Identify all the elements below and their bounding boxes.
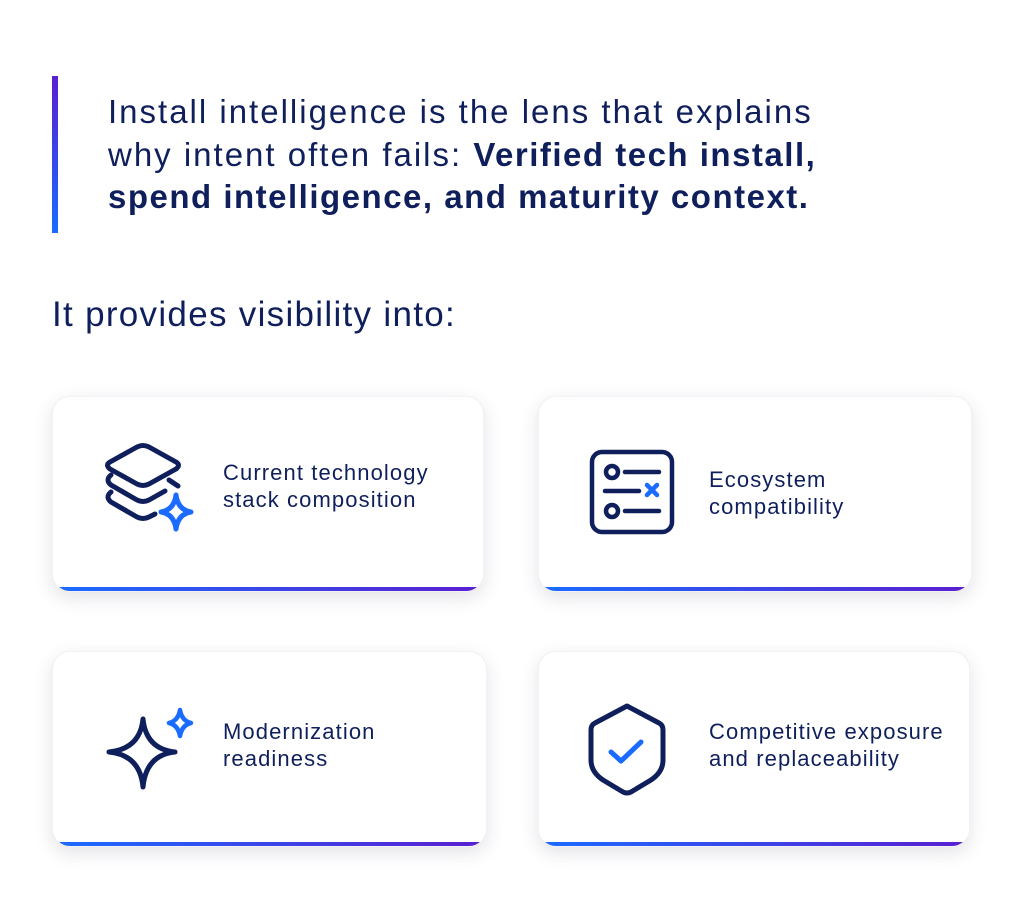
text bbox=[223, 460, 429, 512]
title: why intent often fails: Verified tech install, bbox=[108, 136, 816, 172]
card: technology stack bbox=[52, 396, 484, 592]
text bbox=[223, 719, 376, 771]
text bbox=[709, 719, 944, 771]
icon: shield check bbox=[588, 704, 666, 796]
icon: sparkles bbox=[106, 708, 194, 790]
icon: layers with sparkle bbox=[105, 443, 194, 532]
card: competitive exposure bbox=[538, 651, 970, 847]
text: Competitive exposure bbox=[709, 719, 944, 744]
text bbox=[709, 467, 844, 519]
card: modernization bbox=[52, 651, 487, 847]
text: and replaceability bbox=[709, 746, 900, 771]
text: Modernization bbox=[223, 719, 376, 744]
title: Install intelligence is the lens that explains bbox=[108, 93, 813, 130]
subheading: It provides visibility into: bbox=[52, 295, 456, 334]
text: Current technology bbox=[223, 460, 429, 485]
accent bar bbox=[52, 76, 58, 233]
title bbox=[108, 93, 816, 215]
text: stack composition bbox=[223, 487, 417, 512]
text: Ecosystem bbox=[709, 467, 826, 492]
icon: checklist bbox=[590, 450, 674, 534]
text: compatibility bbox=[709, 494, 844, 519]
text: readiness bbox=[223, 746, 328, 771]
card: ecosystem bbox=[538, 396, 972, 592]
title: spend intelligence, and maturity context. bbox=[108, 178, 809, 215]
